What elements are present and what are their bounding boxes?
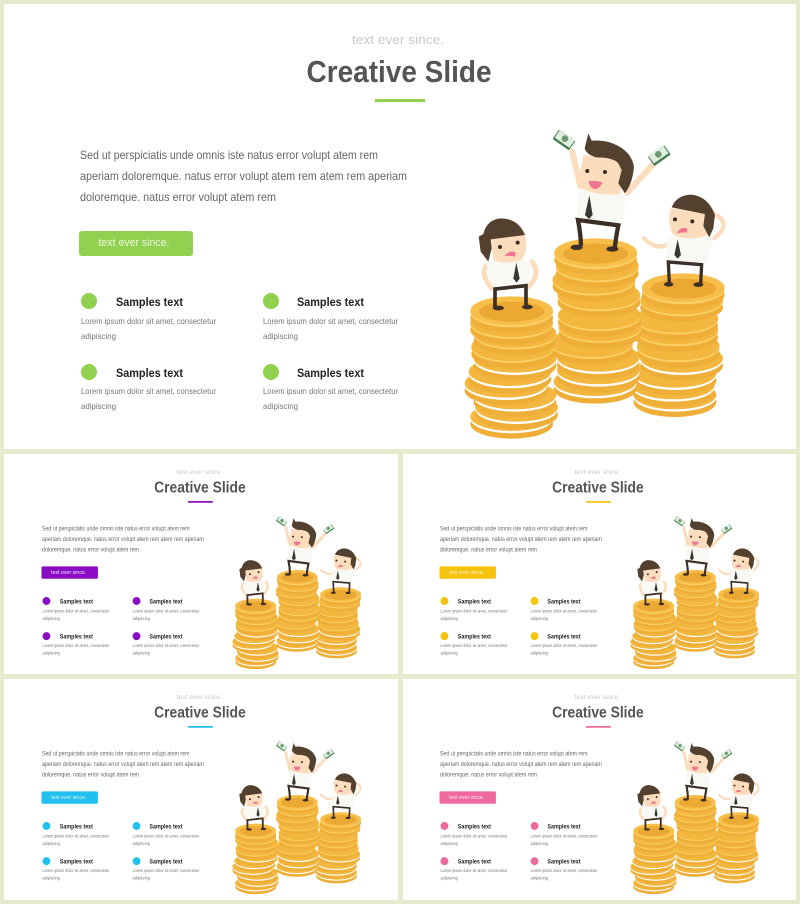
title: Creative Slide [154,480,246,497]
feature item 2: Lorem ipsum dolor sit amet, consectetur [263,316,398,326]
subtitle: text ever since. [575,469,620,476]
feature items: Lorem ipsum dolor sit amet, consectetur [531,868,598,873]
feature items: adipiscing [440,616,458,621]
illustration [232,741,361,894]
feature items: adipiscing [42,841,60,846]
feature items: Lorem ipsum dolor sit amet, consectetur [133,643,200,648]
feature items: Samples text [149,599,183,605]
body text [440,527,602,553]
feature item 1: Lorem ipsum dolor sit amet, consectetur [81,316,216,326]
feature items: Lorem ipsum dolor sit amet, consectetur [440,608,508,613]
title: Creative Slide [552,480,644,497]
feature items: Samples text [547,860,581,866]
subtitle: text ever since. [352,32,444,47]
body text: aperiam doloremque. natus error volupt atem rem atem rem aperiam [42,537,204,543]
feature items: Samples text [60,824,93,830]
body text [42,527,204,553]
title: Creative Slide [552,705,644,722]
feature items: adipiscing [531,841,549,846]
body text: aperiam doloremque. natus error volupt atem rem atem rem aperiam [440,537,602,543]
feature items [42,822,200,880]
feature items: Samples text [60,599,93,605]
feature items: Lorem ipsum dolor sit amet, consectetur [133,868,200,873]
illustration [630,741,759,894]
feature items: adipiscing [440,650,458,655]
feature items: Lorem ipsum dolor sit amet, consectetur [42,833,110,838]
accent line [188,726,213,728]
body text: aperiam doloremque. natus error volupt atem rem atem rem aperiam [440,762,602,768]
feature item 1 [81,293,216,341]
body text: Sed ut perspiciatis unde omnis iste natus error volupt atem rem [42,752,190,758]
feature items: Lorem ipsum dolor sit amet, consectetur [531,643,598,648]
body text: aperiam doloremque. natus error volupt atem rem atem rem aperiam [80,169,407,183]
feature item 4: Samples text [297,366,364,380]
illustration [630,516,759,669]
feature item 2 [263,293,398,341]
feature item 3: Lorem ipsum dolor sit amet, consectetur [81,386,216,396]
feature items: Samples text [547,599,581,605]
body text: doloremque. natus error volupt atem rem [42,547,139,553]
feature items: Samples text [458,635,491,641]
feature items: Samples text [149,824,183,830]
feature items: Samples text [60,860,93,866]
feature items: adipiscing [133,616,151,621]
body text: aperiam doloremque. natus error volupt atem rem atem rem aperiam [42,762,204,768]
subtitle: text ever since. [177,469,222,476]
accent line [188,501,213,503]
feature item 1: Samples text [116,295,183,309]
feature items: adipiscing [42,875,60,880]
feature item 3: adipiscing [81,401,116,411]
body text: doloremque. natus error volupt atem rem [440,772,537,778]
feature items: Samples text [458,824,491,830]
body text: Sed ut perspiciatis unde omnis iste natus error volupt atem rem [80,148,378,162]
body text [80,148,407,204]
feature items: Lorem ipsum dolor sit amet, consectetur [42,643,110,648]
subtitle: text ever since. [575,694,620,701]
feature items: Samples text [60,635,93,641]
accent line [375,99,425,102]
button: text ever since. [98,237,170,249]
feature item 3: Samples text [116,366,183,380]
feature item 1: adipiscing [81,331,116,341]
feature item 2: Samples text [297,295,364,309]
button: text ever since. [449,570,485,576]
body text [440,752,602,778]
title: Creative Slide [154,705,246,722]
button [440,791,496,804]
feature items: adipiscing [531,875,549,880]
button [440,566,496,579]
feature items: Samples text [458,599,491,605]
feature items: Lorem ipsum dolor sit amet, consectetur [42,868,110,873]
feature item 4: adipiscing [263,401,298,411]
feature items: adipiscing [42,616,60,621]
body text: Sed ut perspiciatis unde omnis iste natus error volupt atem rem [440,527,588,533]
illustration [232,516,361,669]
button: text ever since. [449,795,485,801]
button [42,566,98,579]
feature items: adipiscing [42,650,60,655]
panel: purple slide [4,454,398,674]
feature items: adipiscing [440,875,458,880]
accent line [586,726,611,728]
feature items: Samples text [547,824,581,830]
panel: yellow slide [403,454,796,674]
body text: Sed ut perspiciatis unde omnis iste natus error volupt atem rem [42,527,190,533]
feature items: adipiscing [133,650,151,655]
body text: doloremque. natus error volupt atem rem [80,190,276,204]
body text: doloremque. natus error volupt atem rem [440,547,537,553]
feature items: Samples text [149,860,183,866]
feature items [42,597,200,655]
feature items: adipiscing [133,875,151,880]
button [42,791,98,804]
feature items: Samples text [547,635,581,641]
feature items [440,822,598,880]
feature items: Lorem ipsum dolor sit amet, consectetur [531,608,598,613]
feature items: adipiscing [133,841,151,846]
feature items: Lorem ipsum dolor sit amet, consectetur [440,643,508,648]
feature items: Lorem ipsum dolor sit amet, consectetur [440,868,508,873]
title: Creative Slide [306,54,492,89]
feature items: adipiscing [531,650,549,655]
button [79,231,193,256]
feature items [440,597,598,655]
body text: Sed ut perspiciatis unde omnis iste natus error volupt atem rem [440,752,588,758]
illustration: businessmen on coin stacks [465,129,725,439]
feature items: Samples text [458,860,491,866]
feature items: Lorem ipsum dolor sit amet, consectetur [42,608,110,613]
panel: main slide [4,4,796,449]
feature items: Lorem ipsum dolor sit amet, consectetur [133,833,200,838]
panel: pink slide [403,679,796,900]
feature items: Samples text [149,635,183,641]
feature items: Lorem ipsum dolor sit amet, consectetur [440,833,508,838]
feature items: Lorem ipsum dolor sit amet, consectetur [531,833,598,838]
button: text ever since. [51,570,87,576]
feature items: adipiscing [440,841,458,846]
panel: blue slide [4,679,398,900]
feature items: adipiscing [531,616,549,621]
body text: doloremque. natus error volupt atem rem [42,772,139,778]
feature item 2: adipiscing [263,331,298,341]
feature item 3 [81,364,216,411]
feature items: Lorem ipsum dolor sit amet, consectetur [133,608,200,613]
body text [42,752,204,778]
feature item 4: Lorem ipsum dolor sit amet, consectetur [263,386,398,396]
subtitle: text ever since. [177,694,222,701]
feature item 4 [263,364,398,411]
accent line [586,501,611,503]
button: text ever since. [51,795,87,801]
